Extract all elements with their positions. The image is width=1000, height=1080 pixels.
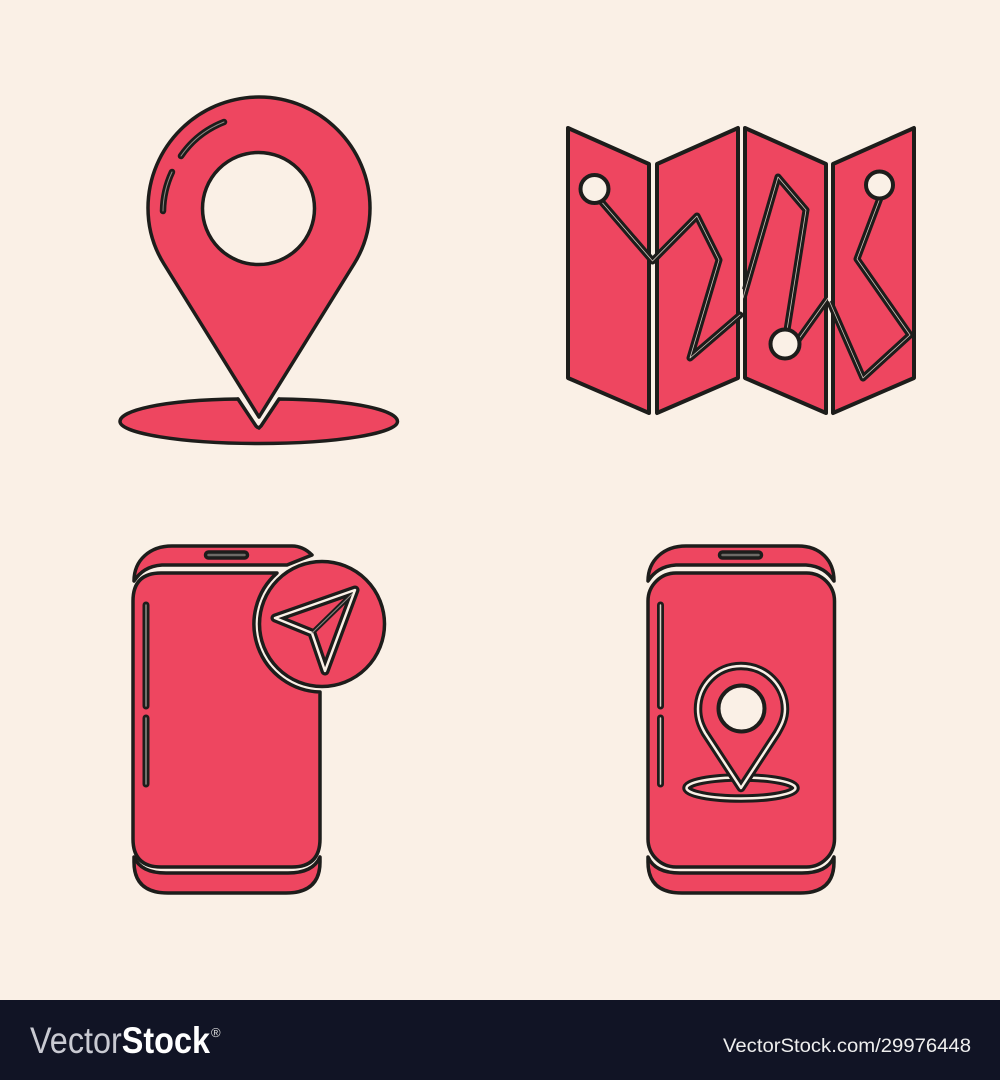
- pin highlight short: [163, 172, 172, 211]
- route line: [600, 177, 910, 378]
- phone body: [648, 573, 834, 867]
- footer logo: VectorStock: [30, 1020, 210, 1061]
- pin body: [148, 97, 370, 417]
- phone bottom cap: [648, 857, 834, 893]
- pin notch outline: [238, 399, 279, 428]
- footer bar: [0, 1000, 1000, 1080]
- pin base ellipse: [120, 399, 398, 444]
- map panel 4: [833, 128, 914, 413]
- phone side button lower: [657, 718, 664, 784]
- map panel 1: [568, 128, 649, 413]
- route waypoint marker: [770, 330, 800, 358]
- footer image id: VectorStock.com/29976448: [723, 1035, 971, 1057]
- map panel 3: [745, 128, 826, 413]
- phone top cap: [134, 546, 312, 581]
- map panel 2: [657, 128, 738, 413]
- phone side button upper: [657, 605, 664, 706]
- route start marker: [580, 175, 608, 203]
- pin gap: [238, 397, 279, 428]
- phone body: [133, 573, 320, 867]
- phone side button lower: [142, 718, 150, 784]
- small pin base ellipse: [686, 778, 796, 798]
- small pin body: [698, 666, 785, 788]
- pin hole: [202, 152, 314, 264]
- route end marker: [866, 172, 893, 198]
- phone top cap: [648, 546, 834, 581]
- navigation arrow: [275, 590, 355, 671]
- icon: phone with navigation arrow: [133, 546, 384, 893]
- icon: phone with location pin: [648, 546, 834, 893]
- footer registered mark: ®: [211, 1025, 221, 1040]
- phone bottom cap: [134, 857, 320, 893]
- pin highlight long: [181, 122, 224, 156]
- fold gaps: [653, 266, 830, 308]
- phone side button upper: [142, 605, 150, 706]
- icon: map pin: [120, 97, 398, 444]
- small pin hole: [718, 686, 764, 732]
- navigation badge: [260, 562, 384, 686]
- phone speaker: [206, 552, 248, 558]
- icon: folded map: [568, 128, 914, 413]
- phone speaker: [720, 552, 762, 558]
